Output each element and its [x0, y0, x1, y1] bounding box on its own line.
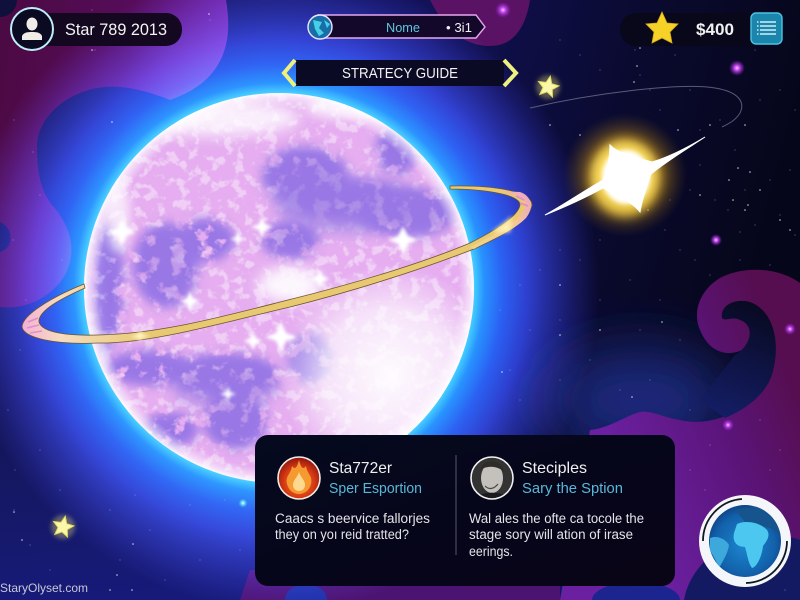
menu button: [751, 13, 782, 44]
left column: star explosion: [275, 457, 430, 542]
player badge: [11, 8, 182, 50]
info panel: [255, 435, 675, 586]
continents: [710, 505, 781, 568]
orbit trail: [530, 86, 742, 127]
glowing dots: [237, 2, 796, 509]
planet ring: [22, 186, 532, 343]
right body text: stage sory will ation of irase: [469, 527, 633, 542]
icon: portrait: [471, 457, 513, 499]
location bar: [308, 15, 485, 39]
icon: fire: [278, 457, 320, 499]
mini globe icon: [308, 15, 332, 39]
planet: [80, 90, 500, 490]
left body text: [275, 511, 430, 542]
location value: • 3i1: [446, 20, 472, 35]
banner title: STRATECY GUIDE: [342, 66, 458, 82]
avatar icon: [11, 8, 53, 50]
left heading: Sta772er: [329, 460, 393, 477]
player name: Star 789 2013: [65, 21, 167, 39]
location name: Nome: [386, 20, 420, 35]
currency bar: [620, 12, 782, 46]
right column: strategies: [469, 457, 644, 559]
left body text: they on yoı reid tratted?: [275, 527, 409, 542]
right body text: eerings.: [469, 544, 513, 559]
currency amount: $400: [696, 20, 734, 39]
right heading: Steciples: [522, 460, 587, 477]
right subheading: Sary the Sption: [522, 481, 623, 497]
icon: gold star: [646, 12, 678, 43]
right body text: Wal ales the ofte ca tocole the: [469, 511, 644, 526]
strategy guide banner: [284, 60, 516, 86]
right body text: [469, 511, 644, 559]
globe button: [699, 495, 791, 587]
watermark: StaryOlyset.com: [0, 581, 88, 595]
left subheading: Sper Esportion: [329, 481, 422, 497]
bright star with spikes: [545, 113, 705, 237]
left body text: Caacs s beervice fallorjes: [275, 511, 430, 526]
small yellow star top: [536, 75, 560, 99]
small yellow star bottom left: [51, 515, 75, 539]
